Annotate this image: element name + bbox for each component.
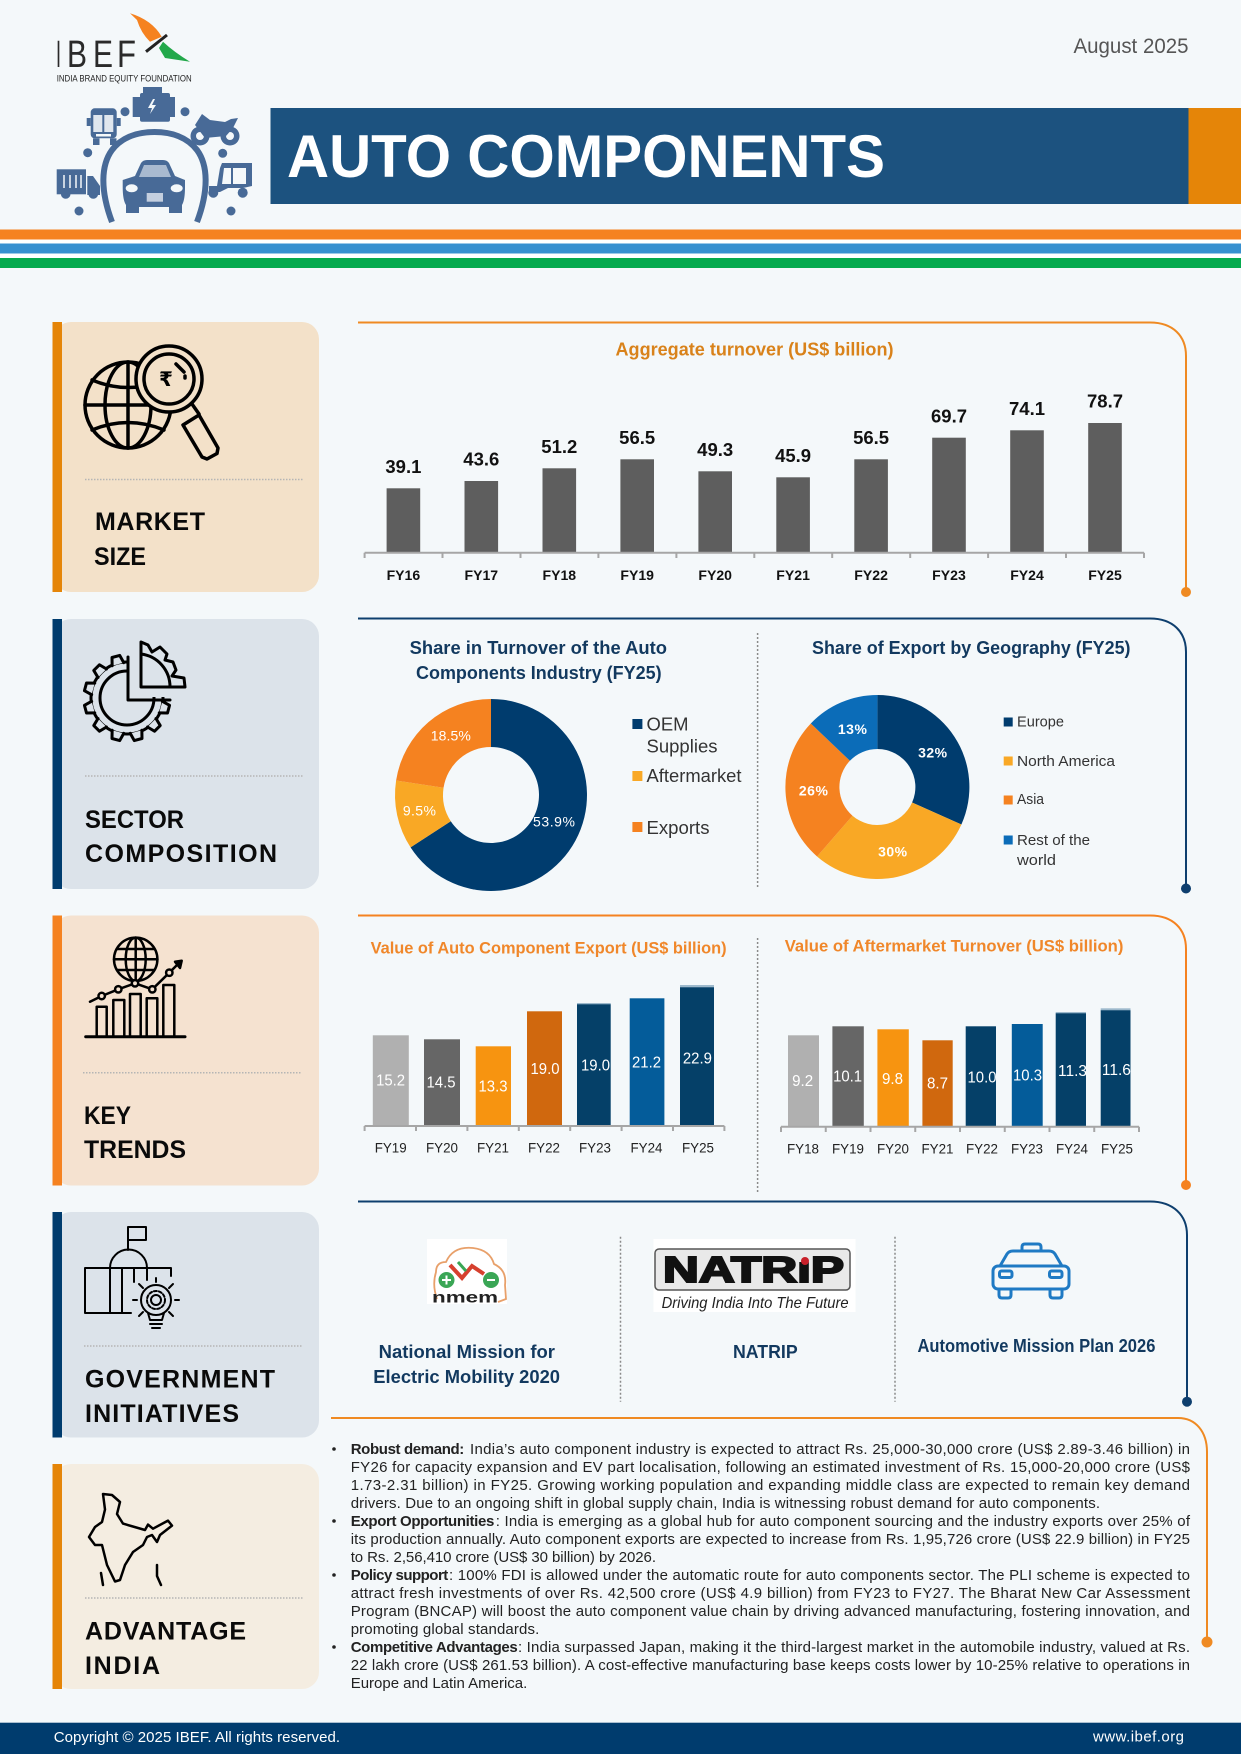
bar chart: aggregate turnover: FY25 <box>1088 567 1122 583</box>
bullet: policy support: Policy support <box>351 1567 448 1584</box>
bar chart: auto component export: FY21 <box>477 1139 509 1155</box>
bar chart: aggregate turnover: FY18 <box>542 567 576 583</box>
heading: key trends: TRENDS <box>84 1136 186 1164</box>
bar chart: aggregate turnover: FY21 <box>776 567 810 583</box>
bar chart: aftermarket turnover: FY23 <box>1011 1140 1043 1156</box>
logo: NATRIP: Driving India Into The Future <box>662 1295 849 1312</box>
bullet: competitive advantages: Competitive Advantages <box>351 1639 518 1656</box>
bar chart: auto component export: 14.5 <box>426 1075 456 1092</box>
bullet: export opportunities: : India is emerging as a global hub for auto component sourcing and the industry exports over 25% of <box>496 1513 1191 1530</box>
initiative label: NATRIP: NATRIP <box>733 1342 798 1362</box>
bar chart: aftermarket turnover: FY21 <box>922 1140 954 1156</box>
bar chart: aggregate turnover: 78.7 <box>1087 392 1123 412</box>
date: August 2025 <box>1074 35 1188 58</box>
logo: IBEF: E <box>93 34 113 76</box>
icon: gear with pie <box>84 642 185 741</box>
tricolour stripes <box>0 230 1241 268</box>
title banner: AUTO COMPONENTS <box>287 123 885 190</box>
heading: key trends: KEY <box>84 1102 131 1130</box>
bullet: competitive advantages: Europe and Latin America. <box>351 1675 527 1692</box>
donut chart: share in turnover: 9.5% <box>403 803 436 819</box>
panel: key trends label <box>52 916 319 1186</box>
bar chart: auto component export: FY20 <box>426 1139 458 1155</box>
icon: vehicles and engine <box>57 87 252 222</box>
heading: advantage india: INDIA <box>85 1652 160 1680</box>
bar chart: aftermarket turnover: 10.0 <box>968 1070 997 1087</box>
bullet: competitive advantages: 22 lakh crore (US$ 261.53 billion). A cost-effective manufacturing base keeps costs lower by 10-25% relative to operations in <box>351 1657 1190 1674</box>
bullet: robust demand: Robust demand: <box>351 1441 464 1458</box>
donut chart: share of export: 26% <box>799 783 828 799</box>
footer: Copyright © 2025 IBEF. All rights reserved. <box>54 1729 340 1746</box>
bar chart: aftermarket turnover: 9.8 <box>882 1071 903 1088</box>
bar chart: aggregate turnover: 49.3 <box>697 440 733 460</box>
donut chart: share of export <box>785 695 969 879</box>
bar chart: aftermarket turnover: 11.6 <box>1102 1062 1131 1079</box>
logo: NATRIP <box>654 1239 856 1312</box>
donut chart: share of export: 13% <box>838 721 867 737</box>
bar chart: auto component export: 15.2 <box>376 1073 405 1090</box>
bar chart: auto component export: FY19 <box>375 1139 407 1155</box>
bar chart: auto component export: 21.2 <box>632 1055 661 1072</box>
chart title: share in turnover: Components Industry (FY25) <box>416 663 662 683</box>
heading: government initiatives <box>85 1366 275 1428</box>
chart title: aggregate turnover: Aggregate turnover (US$ billion) <box>616 340 894 360</box>
bar chart: aggregate turnover: 74.1 <box>1009 399 1045 419</box>
legend: share of export: world <box>1016 852 1056 869</box>
legend: share in turnover: Supplies <box>646 737 718 757</box>
bullet: policy support <box>332 1567 1191 1638</box>
bar chart: aftermarket turnover: 9.2 <box>792 1073 813 1090</box>
legend: share in turnover <box>632 715 742 838</box>
heading: advantage india: ADVANTAGE <box>85 1618 246 1646</box>
bullet: policy support: promoting global standards. <box>351 1621 539 1638</box>
bar chart: aggregate turnover <box>365 392 1144 583</box>
bar chart: auto component export: FY24 <box>630 1139 663 1155</box>
frame: key trends <box>358 916 1190 1189</box>
logo: IBEF: I <box>56 34 61 76</box>
bullet: robust demand: drivers. Due to an ongoing shift in global supply chain, India is witnessing robust demand for auto components. <box>351 1495 1100 1512</box>
bullet: robust demand: FY26 for capacity expansion and EV part localisation, following an estimated investment of Rs. 15,000-20,000 crore (US$ <box>351 1459 1191 1476</box>
frame: advantage india <box>331 1418 1212 1646</box>
initiative label: national mission <box>373 1342 560 1387</box>
donut chart: share of export: 30% <box>878 844 908 860</box>
icon: map of India <box>89 1494 172 1585</box>
heading: sector composition: SECTOR <box>85 806 184 834</box>
heading: advantage india <box>85 1618 246 1680</box>
bar chart: auto component export <box>365 985 724 1155</box>
bullet: robust demand <box>332 1441 1191 1512</box>
panel: advantage india label <box>52 1464 319 1689</box>
logo: NATRIP: NATRıP <box>663 1249 844 1290</box>
bar chart: aggregate turnover: FY17 <box>464 567 498 583</box>
chart title: share in turnover <box>410 638 667 683</box>
bar chart: aggregate turnover: 56.5 <box>619 428 655 448</box>
heading: government initiatives: INITIATIVES <box>85 1400 239 1428</box>
bar chart: aftermarket turnover: 11.3 <box>1058 1063 1087 1080</box>
initiative label: national mission: Electric Mobility 2020 <box>373 1367 560 1387</box>
bullet: policy support: : 100% FDI is allowed under the automatic route for auto components sector. The PLI scheme is expected to <box>449 1567 1190 1584</box>
title banner <box>270 108 1241 204</box>
heading: sector composition: COMPOSITION <box>85 840 277 868</box>
chart title: auto component export: Value of Auto Component Export (US$ billion) <box>371 938 727 957</box>
bar chart: aggregate turnover: FY19 <box>620 567 654 583</box>
bullet: competitive advantages: : India surpassed Japan, making it the third-largest market in the automobile industry, valued at Rs. <box>518 1639 1190 1656</box>
chart title: aftermarket turnover: Value of Aftermarket Turnover (US$ billion) <box>785 937 1123 956</box>
donut chart: share of export: 32% <box>918 745 948 761</box>
logo: IBEF: F <box>117 34 136 76</box>
bar chart: aftermarket turnover: FY24 <box>1056 1140 1088 1156</box>
bullet: robust demand: 1.73-2.31 billion) in FY25. Growing working population and expanding middle class are expected to remain key demand <box>351 1477 1190 1494</box>
logo: nmem <box>427 1239 507 1307</box>
legend: share of export: Rest of the <box>1017 832 1090 849</box>
bar chart: aggregate turnover: FY20 <box>698 567 732 583</box>
text block: advantage india bullets <box>332 1441 1191 1692</box>
donut chart: share in turnover: 18.5% <box>431 728 471 744</box>
frame: market size <box>358 322 1190 596</box>
bar chart: aggregate turnover: 43.6 <box>463 450 499 470</box>
bar chart: aggregate turnover: 69.7 <box>931 406 967 426</box>
bar chart: aftermarket turnover <box>781 1008 1139 1156</box>
logo: IBEF: INDIA BRAND EQUITY FOUNDATION <box>57 74 192 84</box>
bullet: export opportunities: to Rs. 2,56,410 crore (US$ 30 billion) by 2026. <box>351 1549 656 1566</box>
initiative label: automotive mission plan: Automotive Mission Plan 2026 <box>918 1336 1155 1356</box>
bar chart: aggregate turnover: 51.2 <box>541 437 577 457</box>
bar chart: aggregate turnover: 45.9 <box>775 446 811 466</box>
legend: share of export: Asia <box>1017 791 1045 808</box>
legend: share of export <box>1004 714 1116 869</box>
icon glyph: rupee: ₹ <box>159 369 173 391</box>
bar chart: aftermarket turnover: 10.1 <box>833 1069 862 1086</box>
bullet: policy support: attract fresh investments of over Rs. 42,500 crore (US$ 4.9 billion) from FY23 to FY27. The Bharat New Car Assessment <box>351 1585 1191 1602</box>
icon: blue car <box>993 1244 1069 1298</box>
bar chart: aggregate turnover: FY16 <box>387 567 420 583</box>
bar chart: auto component export: 13.3 <box>478 1079 508 1096</box>
heading: market size <box>94 508 205 571</box>
panel: government initiatives label <box>52 1212 319 1438</box>
chart title: share in turnover: Share in Turnover of the Auto <box>410 638 667 658</box>
legend: share of export: Europe <box>1017 714 1064 731</box>
legend: share in turnover: Aftermarket <box>646 766 742 786</box>
logo: nmem: nmem <box>432 1290 498 1307</box>
bullet: policy support: Program (BNCAP) will boost the auto component value chain by driving advanced manufacturing, fostering innovation, and <box>351 1603 1190 1620</box>
bar chart: aftermarket turnover: FY22 <box>966 1140 998 1156</box>
bar chart: aggregate turnover: 39.1 <box>385 457 421 477</box>
bar chart: auto component export: 22.9 <box>683 1050 712 1067</box>
heading: sector composition <box>85 806 277 868</box>
bar chart: aftermarket turnover: FY25 <box>1101 1140 1133 1156</box>
frame: sector composition <box>358 618 1190 892</box>
bar chart: auto component export: FY23 <box>579 1139 611 1155</box>
heading: market size: SIZE <box>94 543 146 571</box>
legend: share of export: North America <box>1017 753 1116 770</box>
bar chart: aggregate turnover: 56.5 <box>853 428 889 448</box>
bar chart: aftermarket turnover: FY19 <box>832 1140 864 1156</box>
heading: key trends <box>84 1102 186 1164</box>
icon: globe with magnifier <box>85 346 218 459</box>
bar chart: aftermarket turnover: FY20 <box>877 1140 909 1156</box>
footer: www.ibef.org <box>1092 1729 1184 1746</box>
donut chart: share in turnover: 53.9% <box>533 814 575 830</box>
frame: government initiatives <box>358 1202 1191 1406</box>
bar chart: aggregate turnover: FY24 <box>1010 567 1044 583</box>
logo: IBEF <box>56 13 192 83</box>
bar chart: aftermarket turnover: 10.3 <box>1013 1068 1042 1085</box>
legend: share in turnover: OEM <box>646 715 688 735</box>
bullet: export opportunities <box>332 1513 1191 1566</box>
donut chart: share in turnover <box>395 699 587 891</box>
bullet: export opportunities: Export Opportunities <box>351 1513 494 1530</box>
icon: government building and bulb <box>85 1227 179 1328</box>
chart title: share of export: Share of Export by Geography (FY25) <box>812 638 1131 658</box>
panel: market size label <box>52 322 319 592</box>
bar chart: auto component export: FY22 <box>528 1139 560 1155</box>
bullet: robust demand: India’s auto component industry is expected to attract Rs. 25,000-30,000 crore (US$ 2.89-3.46 billion) in <box>470 1441 1190 1458</box>
icon: globe and growth bars <box>86 938 185 1037</box>
panel: sector composition label <box>52 619 319 889</box>
bar chart: aggregate turnover: FY23 <box>932 567 966 583</box>
bar chart: aftermarket turnover: 8.7 <box>927 1076 948 1093</box>
bar chart: auto component export: FY25 <box>682 1139 714 1155</box>
bullet: competitive advantages <box>332 1639 1190 1692</box>
bullet: export opportunities: its production annually. Auto component exports are expected to increase from Rs. 1,95,726 crore (US$ 22.9 billion) in FY25 <box>351 1531 1190 1548</box>
footer <box>0 1723 1241 1754</box>
bar chart: aftermarket turnover: FY18 <box>787 1140 819 1156</box>
bar chart: auto component export: 19.0 <box>530 1061 560 1078</box>
logo: IBEF: B <box>67 34 87 76</box>
heading: government initiatives: GOVERNMENT <box>85 1366 275 1394</box>
heading: market size: MARKET <box>95 508 205 536</box>
initiative label: national mission: National Mission for <box>379 1342 555 1362</box>
bar chart: aggregate turnover: FY22 <box>854 567 888 583</box>
bar chart: auto component export: 19.0 <box>581 1058 610 1075</box>
legend: share in turnover: Exports <box>646 818 710 838</box>
